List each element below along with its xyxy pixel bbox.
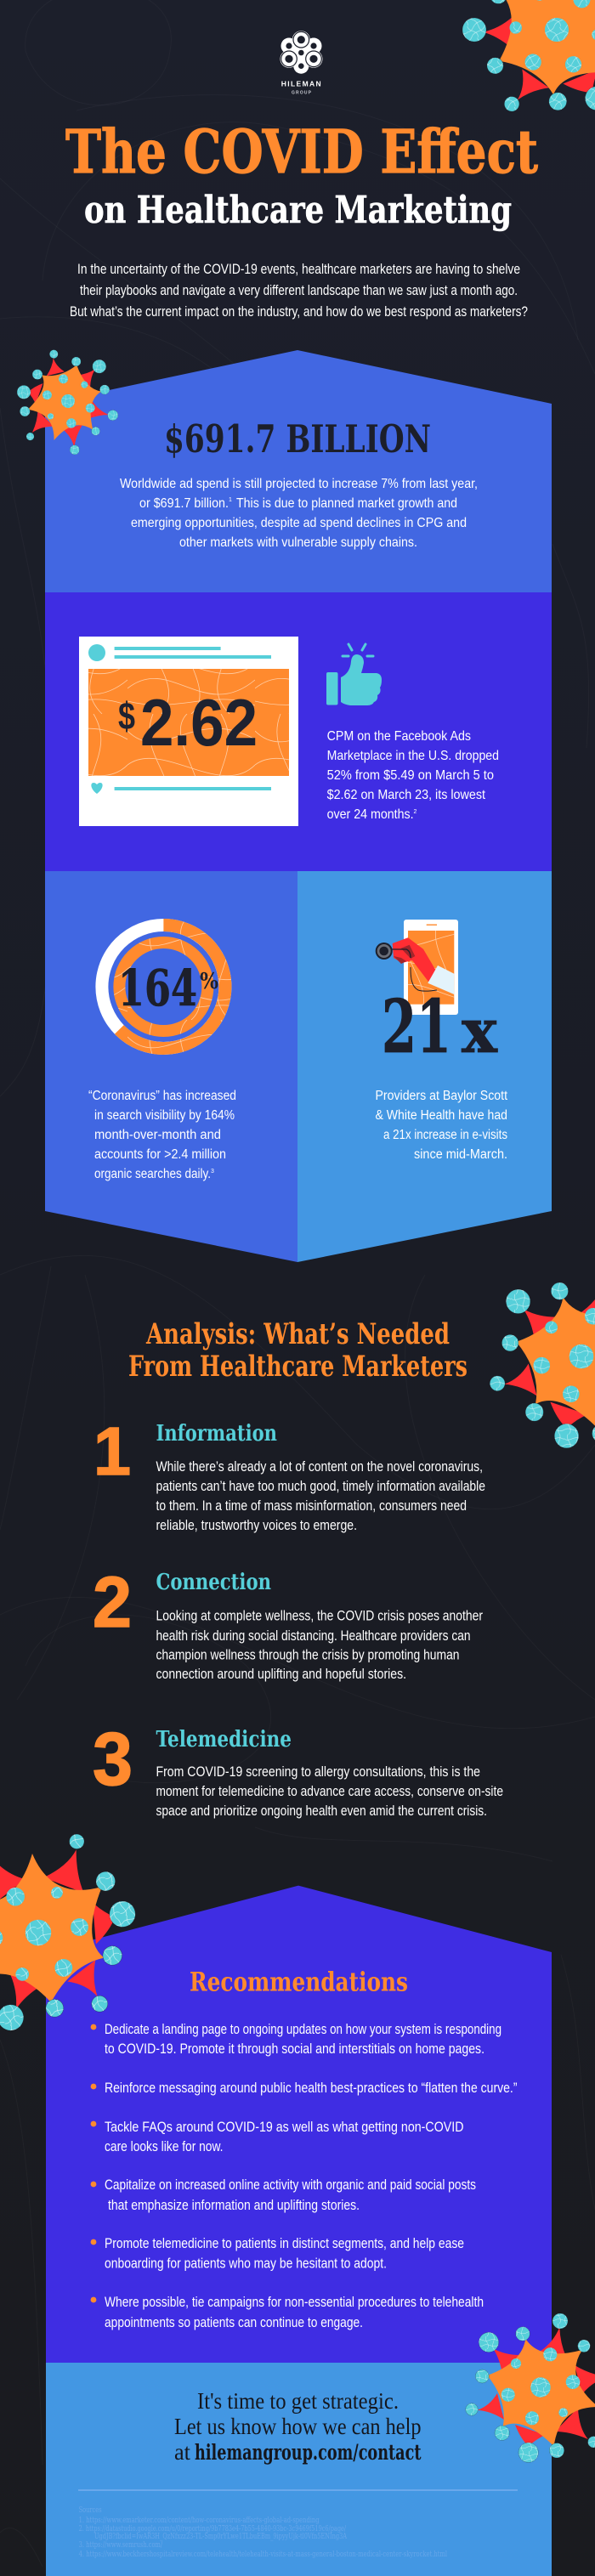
ad spend text: other markets with vulnerable supply chains. [179,535,417,550]
search text: month-over-month and [94,1128,221,1142]
stat: 2.62: $ [118,694,135,738]
sources: 4. https://www.beckhershospitalreview.com/telehealth/telehealth-visits-at-mass-general-boston-medical-center-skyrocket.html [79,2551,447,2559]
panel: call to action [46,2363,552,2576]
logo: Hileman Group [280,31,323,96]
icon: virus right [490,1266,595,1448]
call to action text: at [174,2439,190,2465]
call to action text: Let us know how we can help [174,2414,422,2439]
item 1: information: Information [156,1421,277,1447]
list: recommendations: onboarding for patients who may be hesitant to adopt. [105,2256,387,2271]
search text [88,1089,236,1181]
item 3: telemedicine: moment for telemedicine to advance care access, conserve on-site [156,1784,503,1799]
call to action text: hilemangroup.com/contact [195,2440,422,2465]
item 2: connection: Connection [156,1570,271,1595]
list: recommendations: Where possible, tie campaigns for non-essential procedures to telehealth [105,2295,484,2310]
chart: 164 percent ring: 164 [118,959,197,1017]
item 2: connection: 2 [93,1562,132,1642]
sources: Sources [79,2506,102,2515]
e-visits text: Providers at Baylor Scott [376,1089,508,1103]
heading: analysis: Analysis: What’s Needed [145,1317,450,1351]
ad spend text: 1 [229,497,232,503]
list: recommendations: care looks like for now. [105,2139,223,2154]
intro text [70,261,528,320]
item 3: telemedicine [93,1717,503,1819]
search text: organic searches daily. [94,1167,211,1181]
chart: 164 percent ring: % [200,969,218,994]
panel: search visibility [45,871,298,1262]
panel: e-visits [298,871,552,1262]
item 3: telemedicine: From COVID-19 screening to allergy consultations, this is the [156,1764,480,1780]
item 3: telemedicine: Telemedicine [156,1727,292,1752]
list: recommendations: Dedicate a landing page to ongoing updates on how your system is responding [105,2022,502,2037]
item 1: information: to them. In a time of mass misinformation, consumers need [156,1498,467,1514]
card: social post [79,637,298,826]
icon: small virus [16,349,119,456]
logo: Hileman Group: GROUP [292,90,312,95]
item 2: connection: connection around uplifting and hopeful stories. [156,1667,406,1682]
search text: in search visibility by 164% [94,1108,235,1123]
search text: 3 [211,1169,214,1175]
heading: analysis: From Healthcare Marketers [128,1350,468,1384]
list: recommendations: Tackle FAQs around COVID-19 as well as what getting non-COVID [105,2120,464,2135]
CPM text [327,729,499,822]
icon: phone with stethoscope [376,920,458,1015]
stat: 21x: x [462,995,498,1067]
CPM text: CPM on the Facebook Ads [327,729,471,744]
ad spend text [120,477,478,550]
heading: recommendations: Recommendations [190,1967,408,1997]
search text: “Coronavirus” has increased [88,1089,236,1103]
panel: CPM [45,592,552,871]
CPM text: 52% from $5.49 on March 5 to [327,768,494,783]
CPM text: 2 [413,809,416,815]
e-visits text: & White Health have had [376,1108,507,1123]
item 1: information: patients can’t have too much good, timely information available [156,1479,485,1494]
stat: 691.7 billion: $691.7 BILLION [164,416,431,461]
item 2: connection: champion wellness through the crisis by promoting human [156,1647,459,1662]
icon: virus top right [431,0,595,157]
sources: 2. https://datastudio.google.com/u/0/reporting/9b7783e4-7b55-4840-93bc-3c9469f519c6/page/ [79,2525,347,2534]
search text: accounts for >2.4 million [94,1147,226,1162]
list: recommendations [91,2022,517,2330]
e-visits text [376,1089,508,1162]
list: recommendations: that emphasize information and uplifting stories. [108,2198,360,2213]
item 1: information: 1 [94,1413,131,1489]
CPM text: $2.62 on March 23, its lowest [327,788,485,802]
list: recommendations: Reinforce messaging around public health best-practices to “flatten the curve.” [105,2081,517,2096]
item 2: connection [93,1562,483,1682]
ad spend text: This is due to planned market growth and [236,496,457,511]
item 3: telemedicine: space and prioritize ongoing health even amid the current crisis. [156,1803,487,1819]
sources: UgdJB?fbclid=IwAR3H_QzNfxzz23-TL-Smp0rYLwe1TLbuEBm_9ipyyUjk-tl0Vfn5ENIng3A [94,2533,347,2541]
sources [79,2506,447,2559]
ad spend text: emerging opportunities, despite ad spend declines in CPG and [131,516,467,530]
sources: 3. https://www.semrush.com/ [79,2541,163,2550]
chart: 164 percent ring [102,925,225,1049]
list: recommendations: Capitalize on increased online activity with organic and paid social posts [105,2177,476,2193]
item 1: information [94,1413,485,1533]
list: recommendations: appointments so patients can continue to engage. [105,2315,363,2330]
item 3: telemedicine: 3 [93,1717,133,1801]
item 2: connection: Looking at complete wellness, the COVID crisis poses another [156,1608,483,1623]
e-visits text: since mid-March. [414,1147,507,1162]
icon: thumbs up [326,644,382,705]
icon: virus bottom right [466,2313,595,2462]
logo: Hileman Group: HILEMAN [281,80,321,88]
panel: ad spend [45,350,552,592]
stat: 2.62: 2.62 [140,685,258,760]
item 1: information: While there’s already a lot of content on the novel coronavirus, [156,1459,483,1475]
e-visits text: a 21x increase in e-visits [383,1128,507,1142]
call to action text [174,2388,422,2465]
item 2: connection: health risk during social distancing. Healthcare providers can [156,1628,471,1644]
list: recommendations: to COVID-19. Promote it through social and interstitials on home pages. [105,2041,484,2057]
list: recommendations: Promote telemedicine to patients in distinct segments, and help ease [105,2236,464,2251]
stat: 21x: 21 [382,984,451,1070]
ad spend text: Worldwide ad spend is still projected to increase 7% from last year, [120,477,478,491]
ad spend text: or $691.7 billion. [139,496,229,511]
CPM text: Marketplace in the U.S. dropped [327,749,499,763]
call to action text: It's time to get strategic. [197,2388,399,2414]
title [65,116,538,232]
sources: 1. https://www.emarketer.com/content/how-coronavirus-affects-global-ad-spending [79,2517,320,2525]
panel: recommendations [46,1886,552,2363]
item 1: information: reliable, trustworthy voices to emerge. [156,1518,357,1533]
icon: virus left [0,1801,167,2060]
heading: analysis [128,1317,468,1384]
CPM text: over 24 months. [327,807,414,822]
